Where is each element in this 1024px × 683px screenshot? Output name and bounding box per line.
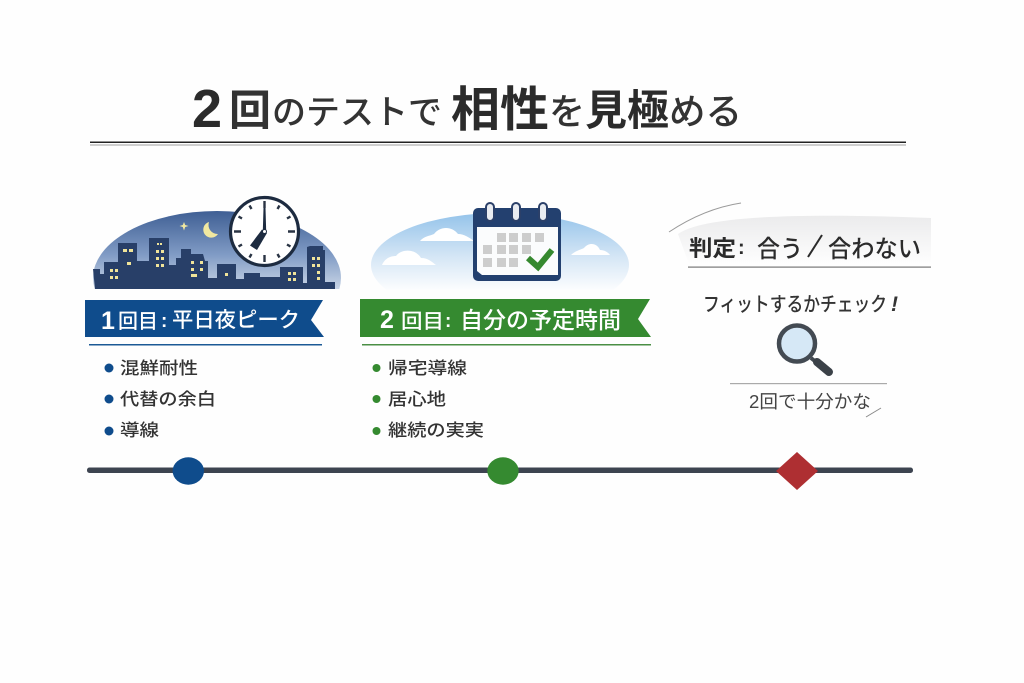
icon: moon <box>203 222 218 238</box>
banner: second test: 回目 <box>401 311 444 333</box>
title: 見極 <box>585 87 669 134</box>
banner: first test: : <box>161 311 167 332</box>
heading: verdict <box>689 235 921 263</box>
banner: first test <box>85 300 324 337</box>
subheading: ! <box>891 293 898 316</box>
subheading: フィットするかチェック <box>703 293 887 316</box>
title: める <box>669 91 742 132</box>
marker: first test <box>173 457 204 485</box>
icon: star <box>180 222 188 230</box>
banner: first test: 1 <box>101 307 115 335</box>
note: 2回で十分かな <box>749 392 871 412</box>
heading: verdict: 判定 <box>689 236 736 261</box>
panel: first test <box>85 198 341 440</box>
title rule <box>90 142 906 146</box>
title: のテストで <box>272 94 442 132</box>
panel: second test <box>360 203 651 440</box>
list: first test points: 混鮮耐性 <box>120 359 198 378</box>
banner: first test: 回目 <box>118 311 158 333</box>
title <box>192 79 742 139</box>
icon: calendar <box>473 203 561 281</box>
list: second test points: 継続の実実 <box>388 421 484 440</box>
marker: verdict <box>776 452 818 490</box>
timeline <box>87 452 913 490</box>
title: 2 <box>192 79 222 139</box>
heading: verdict: 合う <box>757 236 803 263</box>
marker: second test <box>487 457 519 485</box>
list: first test points: 代替の余白 <box>120 390 216 409</box>
banner: second test <box>360 299 651 337</box>
title: を <box>549 91 585 132</box>
title: 回 <box>229 87 271 134</box>
list: first test points: 導線 <box>120 421 159 440</box>
icon: clock <box>230 198 298 266</box>
decorative band <box>678 216 931 267</box>
list: first test points <box>104 359 216 440</box>
list: second test points: 居心地 <box>388 390 446 409</box>
title: 相性 <box>451 84 549 137</box>
list: second test points: 帰宅導線 <box>388 359 467 378</box>
banner: second test: 2 <box>380 306 394 334</box>
heading: verdict: : <box>738 237 745 259</box>
heading: verdict: 合わない <box>828 236 921 263</box>
banner: second test: : <box>445 311 451 332</box>
icon: magnifying glass <box>779 326 829 372</box>
list: second test points <box>372 359 484 440</box>
banner: second test: 自分の予定時間 <box>460 307 621 333</box>
panel: verdict <box>669 203 931 417</box>
banner: first test: 平日夜ピーク <box>172 309 300 332</box>
illustration: sky <box>371 214 629 284</box>
illustration: night city <box>93 211 341 289</box>
